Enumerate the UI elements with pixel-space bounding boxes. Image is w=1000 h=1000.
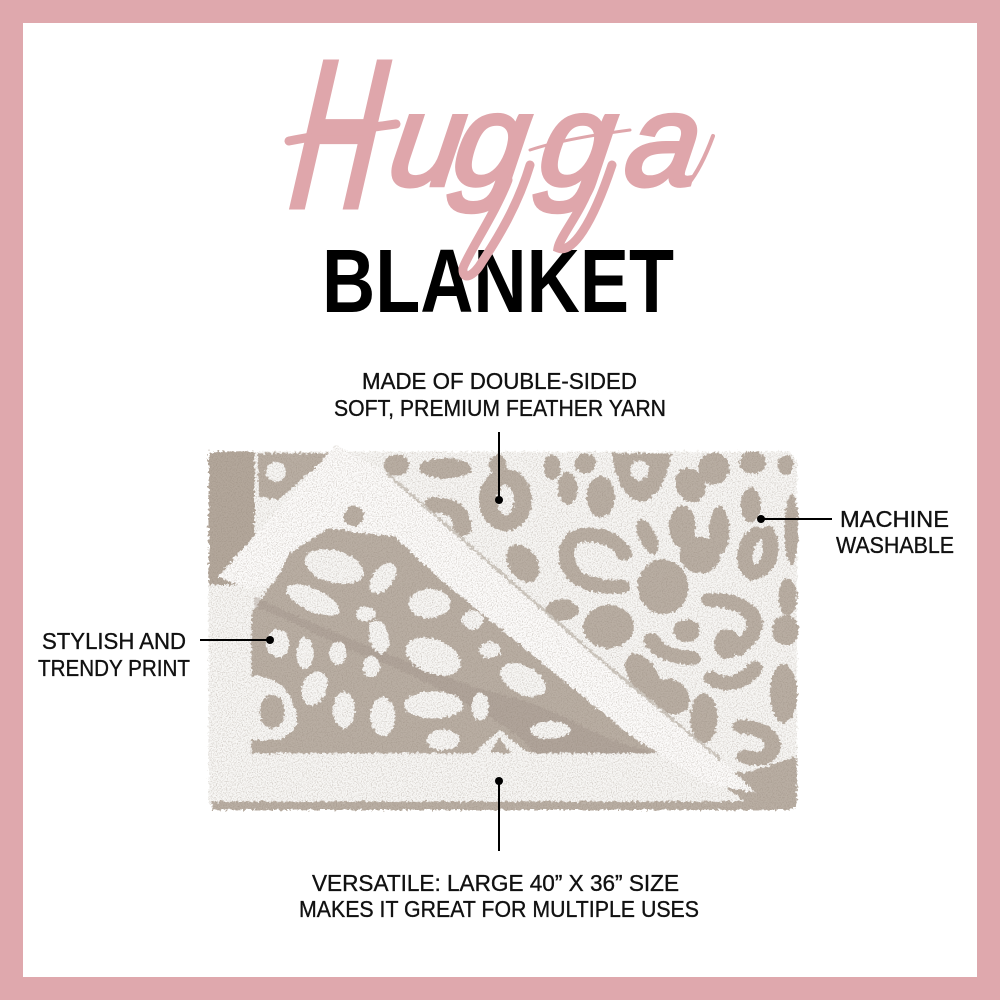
- white fold band: [218, 445, 756, 793]
- callout: versatile size: MAKES IT GREAT FOR MULTIPLE USES: [299, 896, 699, 922]
- blanket base: [209, 452, 797, 810]
- title: Hugga brush script: [284, 21, 713, 276]
- callout: machine washable: [757, 506, 954, 558]
- fold edge shadow: [387, 473, 721, 760]
- taupe inner spots: [260, 695, 511, 753]
- callout: machine washable: MACHINE: [840, 506, 949, 532]
- callout: versatile size: VERSATILE: LARGE 40” X 36” SIZE: [312, 870, 679, 896]
- title: Hugga brush script: H: [284, 21, 394, 249]
- callout: made of feather yarn: MADE OF DOUBLE-SIDED: [362, 368, 637, 394]
- fold shadow: [254, 597, 659, 753]
- top-left print patch: [258, 453, 332, 500]
- taupe reverse side at left: [209, 452, 254, 585]
- white spots on taupe print: [249, 543, 570, 755]
- callout: stylish print: STYLISH AND: [42, 628, 186, 654]
- fold print fragment: [344, 506, 364, 526]
- leopard spots on white side: [384, 451, 799, 743]
- blanket photo illustration: [209, 445, 799, 810]
- callout: made of feather yarn: [334, 368, 666, 504]
- taupe bottom edge: [212, 757, 797, 810]
- taupe print panel with white spots: [251, 528, 663, 753]
- callout: stylish print: [38, 628, 274, 681]
- title: Hugga brush script: ugga: [382, 68, 711, 213]
- callout: stylish print: TRENDY PRINT: [38, 655, 190, 681]
- callout: machine washable: WASHABLE: [836, 532, 954, 558]
- callout: versatile size: [299, 777, 699, 922]
- callout: made of feather yarn: SOFT, PREMIUM FEATHER YARN: [334, 395, 666, 421]
- title: BLANKET: BLANKET: [322, 232, 674, 332]
